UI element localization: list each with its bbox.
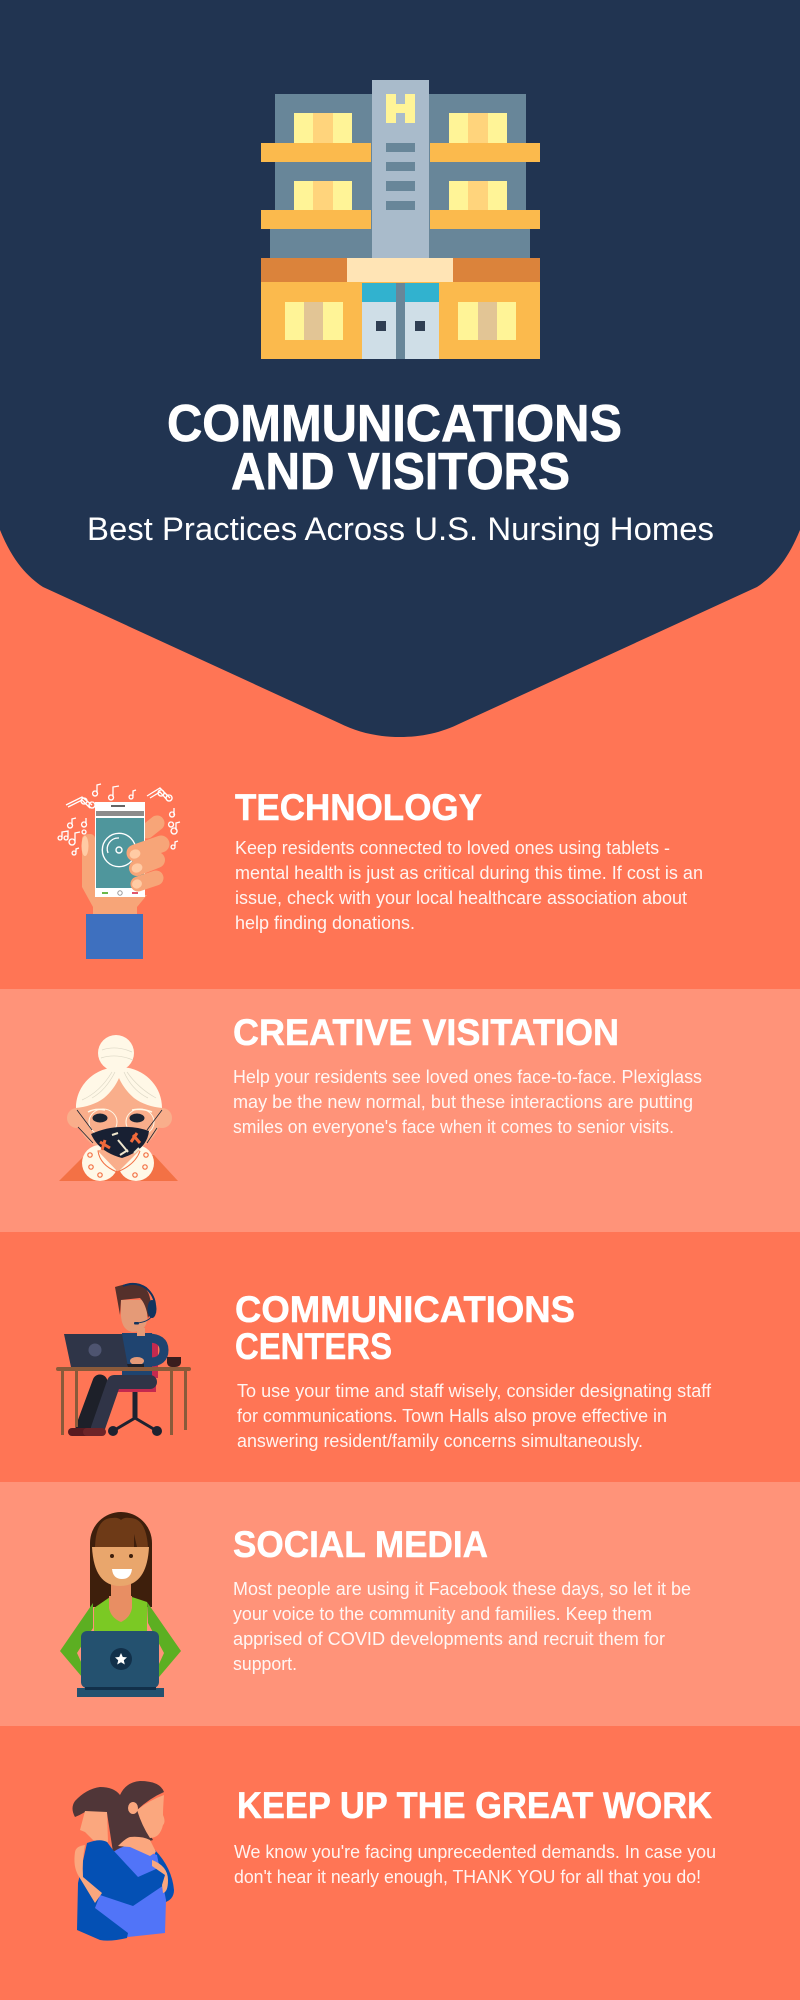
text block: technology: Keep residents connected to loved ones using tablets -	[235, 838, 670, 858]
panel: technology	[58, 784, 703, 959]
panel: creative visitation	[59, 1012, 702, 1181]
text block: technology: help finding donations.	[235, 913, 415, 933]
text block: communications centers: To use your time and staff wisely, consider designating staff	[237, 1381, 712, 1401]
text block: creative visitation	[233, 1067, 702, 1137]
icon: grandmother wearing mask	[59, 1035, 178, 1181]
panel: communications centers	[56, 1283, 712, 1451]
text block: creative visitation: may be the new normal, but these interactions are putting	[233, 1092, 693, 1112]
panel: social media	[60, 1512, 691, 1697]
text block: social media	[233, 1579, 691, 1674]
header panel	[0, 0, 800, 737]
text block: technology: issue, check with your local healthcare association about	[235, 888, 687, 908]
icon: nursing home building	[261, 80, 540, 359]
band: creative visitation background	[0, 989, 800, 1232]
text block: social media: Most people are using it Facebook these days, so let it be	[233, 1579, 691, 1599]
text block: communications centers: answering resident/family concerns simultaneously.	[237, 1431, 643, 1451]
text block: technology	[235, 838, 703, 933]
icon: man with headset at desk	[56, 1283, 191, 1436]
text block: keep up the great work	[234, 1842, 716, 1887]
icon: two people hugging	[72, 1781, 174, 1941]
text block: communications centers	[237, 1381, 712, 1451]
text block: social media: support.	[233, 1654, 297, 1674]
title: AND VISITORS	[231, 443, 570, 501]
icon: woman with laptop	[60, 1512, 181, 1697]
text block: social media: your voice to the community and families. Keep them	[233, 1604, 652, 1624]
text block: social media: apprised of COVID developments and recruit them for	[233, 1629, 665, 1649]
panel: keep up the great work	[72, 1781, 716, 1941]
heading: communications centers	[235, 1289, 575, 1367]
text block: creative visitation: Help your residents see loved ones face-to-face. Plexiglass	[233, 1067, 702, 1087]
band: social media background	[0, 1482, 800, 1726]
heading: technology: TECHNOLOGY	[235, 787, 482, 828]
icon: hand holding phone with music notes	[58, 784, 180, 959]
heading: creative visitation: CREATIVE VISITATION	[233, 1012, 619, 1053]
title	[167, 395, 622, 501]
text block: creative visitation: smiles on everyone's face when it comes to senior visits.	[233, 1117, 674, 1137]
text block: technology: mental health is just as critical during this time. If cost is an	[235, 863, 703, 883]
heading: communications centers: CENTERS	[235, 1326, 392, 1367]
heading: keep up the great work: KEEP UP THE GREAT WORK	[237, 1785, 712, 1826]
heading: communications centers: COMMUNICATIONS	[235, 1289, 575, 1330]
text block: communications centers: for communications. Town Halls also prove effective in	[237, 1406, 667, 1426]
title: COMMUNICATIONS	[167, 395, 622, 453]
heading: social media: SOCIAL MEDIA	[233, 1524, 488, 1565]
subtitle: Best Practices Across U.S. Nursing Homes	[87, 511, 714, 547]
text block: keep up the great work: We know you're facing unprecedented demands. In case you	[234, 1842, 716, 1862]
text block: keep up the great work: don't hear it nearly enough, THANK YOU for all that you do!	[234, 1867, 701, 1887]
